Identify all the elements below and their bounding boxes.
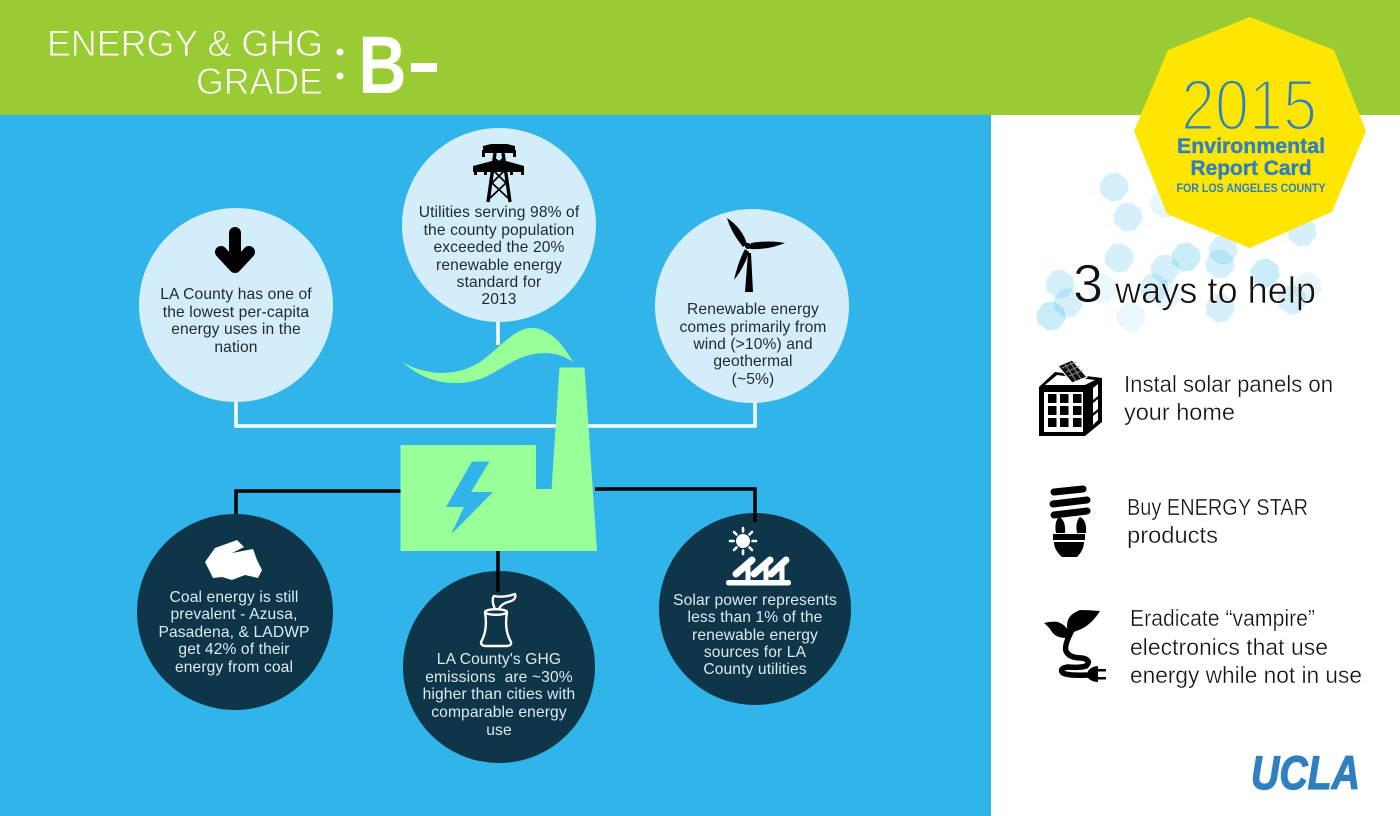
icon: plant with plug (1044, 610, 1106, 682)
grade B minus: B (358, 20, 406, 111)
text: renewable sources: (~5%) (732, 371, 774, 388)
circle: coal energy (137, 514, 333, 710)
icon: transmission tower (473, 144, 524, 202)
icon: coal lump (205, 540, 262, 580)
text: solar power: less than 1% of the (688, 609, 822, 626)
text: low per-capita use: the lowest per-capita (163, 304, 309, 321)
icon: energy-saving bulb (1053, 489, 1087, 557)
text: solar panels: Instal solar panels on (1124, 371, 1333, 397)
factory building (400, 368, 597, 551)
text: solar power (673, 592, 837, 678)
logo: UCLA: UCLA (1251, 746, 1360, 799)
circle: GHG emissions (403, 570, 595, 763)
connector lines: black (236, 489, 755, 592)
factory illustration (400, 328, 597, 551)
text: low per-capita use (160, 286, 312, 356)
lightning bolt (446, 462, 493, 534)
title: energy and GHG grade (47, 22, 344, 102)
icon: sun and solar panels (726, 528, 791, 586)
text: renewable sources: wind (>10%) and (692, 336, 813, 353)
heading: 3 ways to help: 3 (1073, 254, 1103, 314)
header band (0, 0, 1400, 115)
text: solar panels: your home (1124, 399, 1235, 425)
text: GHG emissions: emissions are ~30% (425, 669, 573, 686)
text: energy star: products (1127, 522, 1218, 548)
text: renewable sources: comes primarily from (679, 319, 827, 336)
badge: 2015 environmental report card (1134, 17, 1366, 248)
text: GHG emissions: use (486, 722, 512, 739)
text: coal energy (158, 589, 310, 676)
text: coal energy: energy from coal (175, 659, 293, 676)
connector lines: white (236, 318, 755, 426)
blue main panel (0, 115, 991, 816)
text: energy star (1127, 494, 1308, 548)
text: coal energy: Pasadena, & LADWP (158, 624, 310, 641)
circle: renewable sources (655, 209, 849, 403)
text: low per-capita use: energy uses in the (171, 321, 301, 338)
text: low per-capita use: nation (214, 339, 258, 356)
text: GHG emissions: higher than cities with (423, 686, 575, 703)
text: GHG emissions (423, 651, 575, 739)
circle: utilities renewable standard (402, 128, 596, 322)
circle: low per-capita use (139, 208, 333, 402)
text: solar power: renewable energy (692, 627, 818, 644)
title: energy and GHG grade: ENERGY & GHG (47, 22, 323, 64)
text: vampire electronics: energy while not in use (1130, 662, 1362, 688)
decorative pale octagons (1036, 172, 1322, 332)
text: renewable sources (679, 301, 827, 388)
black connector stub (496, 570, 500, 592)
icon: building with solar panel (1039, 360, 1102, 436)
text: utilities: 2013 (481, 291, 517, 308)
text: utilities: Utilities serving 98% of (419, 204, 580, 221)
text: renewable sources: geothermal (713, 353, 793, 370)
circle: solar power (659, 513, 851, 705)
text: utilities (419, 204, 580, 308)
black connector stub (753, 513, 757, 522)
smoke plume (402, 328, 573, 383)
text: vampire electronics: electronics that use (1130, 634, 1328, 660)
badge: 2015 environmental report card: Environmental (1177, 135, 1325, 158)
icon: cooling tower (481, 594, 515, 646)
text: coal energy: prevalent - Azusa, (171, 606, 297, 623)
icon: wind turbine (727, 218, 785, 292)
icon: down arrow (221, 233, 249, 267)
text: utilities: the county population (424, 222, 574, 239)
text: solar power: County utilities (703, 661, 807, 678)
text: utilities: exceeded the 20% (433, 239, 565, 256)
text: energy star: Buy ENERGY STAR (1127, 494, 1308, 520)
title: energy and GHG grade: GRADE (196, 60, 323, 102)
text: coal energy: Coal energy is still (170, 589, 298, 606)
text: solar panels (1124, 371, 1333, 425)
text: GHG emissions: comparable energy (431, 704, 567, 721)
text: solar power: sources for LA (704, 644, 807, 661)
text: vampire electronics: Eradicate “vampire” (1130, 605, 1315, 631)
heading: 3 ways to help (1073, 254, 1316, 314)
text: GHG emissions: LA County's GHG (437, 651, 561, 668)
text: coal energy: get 42% of their (178, 641, 290, 658)
heading: 3 ways to help: ways to help (1114, 270, 1316, 311)
badge: 2015 environmental report card: 2015 (1181, 66, 1317, 146)
text: solar power: Solar power represents (673, 592, 837, 609)
text: vampire electronics (1130, 605, 1362, 688)
text: renewable sources: Renewable energy (687, 301, 819, 318)
badge: 2015 environmental report card: FOR LOS ANGELES COUNTY (1176, 183, 1326, 195)
text: utilities: renewable energy (436, 257, 562, 274)
text: utilities: standard for (457, 274, 541, 291)
badge: 2015 environmental report card: Report Card (1190, 157, 1312, 180)
text: low per-capita use: LA County has one of (160, 286, 312, 303)
